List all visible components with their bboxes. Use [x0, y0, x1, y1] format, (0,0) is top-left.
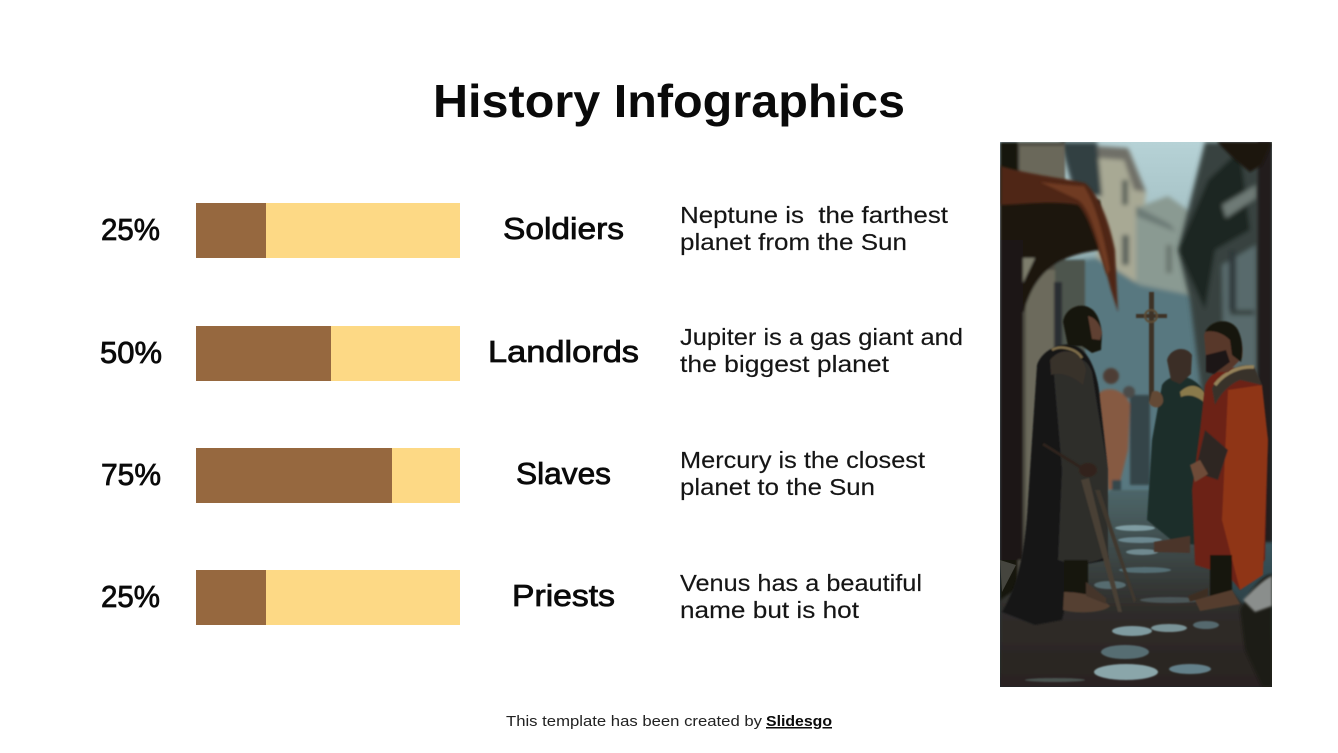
footer credit: Slidesgo — [766, 713, 832, 730]
cross staff — [1136, 292, 1167, 402]
label: Soldiers: Soldiers — [503, 211, 624, 246]
swords — [1043, 444, 1136, 612]
description: Venus — [680, 570, 922, 623]
description: Jupiter: Jupiter is a gas giant and — [680, 324, 963, 350]
left stone wall and arch — [1000, 142, 1100, 602]
right soldier head — [1204, 321, 1243, 374]
description: Neptune: planet from the Sun — [680, 229, 907, 255]
bar: 75% — [196, 448, 460, 503]
illustration: medieval alley scene — [1000, 142, 1272, 687]
priest — [1147, 349, 1206, 553]
title: History Infographics — [433, 75, 905, 127]
description: Jupiter — [680, 324, 963, 377]
label: Slaves: Slaves — [516, 456, 611, 491]
description: Venus: name but is hot — [680, 597, 860, 623]
row: Soldiers — [101, 202, 949, 258]
left soldier — [1002, 344, 1110, 625]
description: Neptune — [680, 202, 949, 255]
wet cobbles — [1025, 525, 1219, 682]
red awning — [1001, 166, 1118, 312]
bar: 50% — [196, 326, 460, 381]
right soldier — [1188, 365, 1268, 611]
far buildings — [1059, 142, 1199, 492]
row: Slaves — [101, 447, 926, 503]
description: Mercury: Mercury is the closest — [680, 447, 926, 473]
description: Mercury — [680, 447, 926, 500]
background figures — [1097, 368, 1150, 500]
description: Venus: Venus has a beautiful — [680, 570, 922, 596]
percentage: 50%: 50% — [100, 335, 162, 370]
label: Priests: Priests — [512, 578, 615, 613]
label: Landlords: Landlords — [488, 334, 639, 369]
percentage: 25%: 25% — [101, 579, 160, 614]
row: Landlords — [100, 324, 963, 381]
description: Neptune: Neptune is the farthest — [680, 202, 949, 228]
footer credit: This template has been created by — [506, 713, 763, 730]
bar: 25% — [196, 203, 460, 258]
row: Priests — [101, 570, 922, 625]
description: Mercury: planet to the Sun — [680, 474, 875, 500]
description: Jupiter: the biggest planet — [680, 351, 890, 377]
bar: 25% — [196, 570, 460, 625]
right buildings — [1178, 142, 1272, 540]
percentage: 25%: 25% — [101, 212, 160, 247]
rocks at right — [1240, 574, 1272, 687]
left soldier head — [1063, 306, 1102, 353]
percentage: 75%: 75% — [101, 457, 161, 492]
ground — [1000, 490, 1272, 687]
